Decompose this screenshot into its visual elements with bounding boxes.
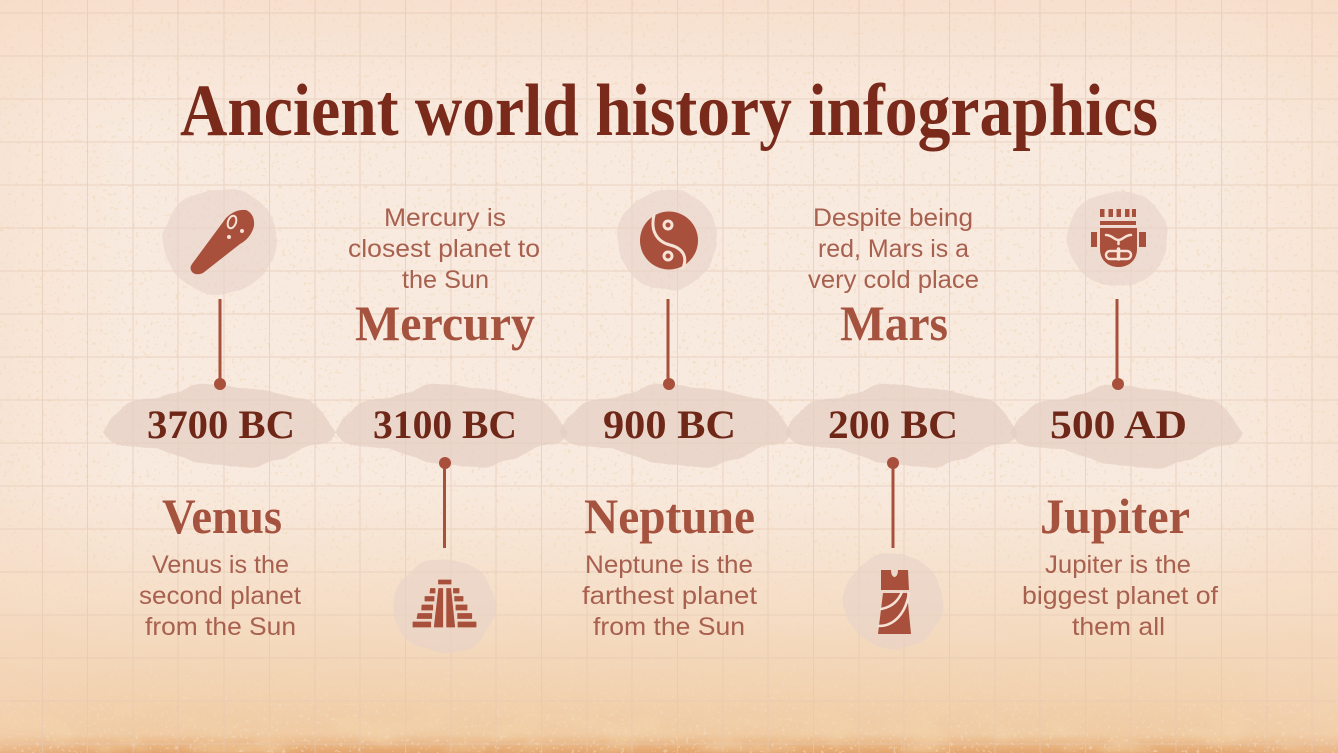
date blob: 900 BC: 900 BC	[603, 402, 736, 447]
description: Mercury: Mercury is	[384, 204, 506, 232]
column: Jupiter	[1010, 191, 1243, 641]
description: Mars: very cold place	[808, 266, 979, 294]
connector line	[439, 457, 451, 548]
description: Mercury: the Sun	[402, 266, 489, 294]
connector line	[663, 299, 675, 390]
description: Venus	[139, 551, 301, 641]
column: Mercury	[335, 204, 568, 653]
connector line	[1112, 299, 1124, 390]
description: Venus: from the Sun	[145, 613, 296, 641]
description: Mars: red, Mars is a	[818, 235, 969, 263]
description: Jupiter: biggest planet of	[1022, 582, 1218, 610]
date blob: 500 AD: 500 AD	[1050, 402, 1187, 447]
date blob: 200 BC	[785, 385, 1018, 467]
heading: Neptune: Neptune	[584, 488, 755, 544]
date blob: 3100 BC	[335, 385, 568, 467]
description: Venus: Venus is the	[152, 551, 289, 579]
heading: Mars: Mars	[840, 295, 948, 351]
heading: Mercury: Mercury	[355, 295, 535, 351]
date blob: 500 AD	[1010, 386, 1243, 468]
description: Neptune: Neptune is the	[585, 551, 753, 579]
date blob: 3100 BC: 3100 BC	[373, 402, 517, 447]
column: Mars	[785, 204, 1018, 648]
heading: Venus: Venus	[162, 488, 282, 544]
description: Neptune	[582, 551, 757, 641]
title: Ancient world history infographics	[180, 70, 1158, 152]
heading: Jupiter: Jupiter	[1040, 488, 1190, 544]
description: Mars: Despite being	[813, 204, 973, 232]
icon: tribal mask	[1067, 191, 1168, 286]
icon: club	[163, 188, 277, 294]
date blob: 900 BC	[559, 385, 792, 467]
description: Mercury: closest planet to	[348, 235, 540, 263]
connector line	[887, 457, 899, 548]
icon: dress	[843, 554, 944, 648]
column: Neptune	[559, 190, 792, 641]
icon: pyramid	[392, 559, 495, 653]
description: Venus: second planet	[139, 582, 301, 610]
description: Jupiter: Jupiter is the	[1045, 551, 1191, 579]
date blob: 3700 BC: 3700 BC	[147, 402, 295, 447]
column: Venus	[103, 188, 336, 641]
description: Jupiter	[1022, 551, 1218, 641]
description: Neptune: farthest planet	[582, 582, 757, 610]
description: Mercury	[348, 204, 540, 294]
description: Jupiter: them all	[1072, 613, 1165, 641]
description: Neptune: from the Sun	[593, 613, 745, 641]
connector line	[214, 299, 226, 390]
icon: yin yang	[618, 190, 719, 290]
date blob: 3700 BC	[103, 385, 336, 467]
date blob: 200 BC: 200 BC	[828, 402, 958, 447]
description: Mars	[808, 204, 979, 294]
